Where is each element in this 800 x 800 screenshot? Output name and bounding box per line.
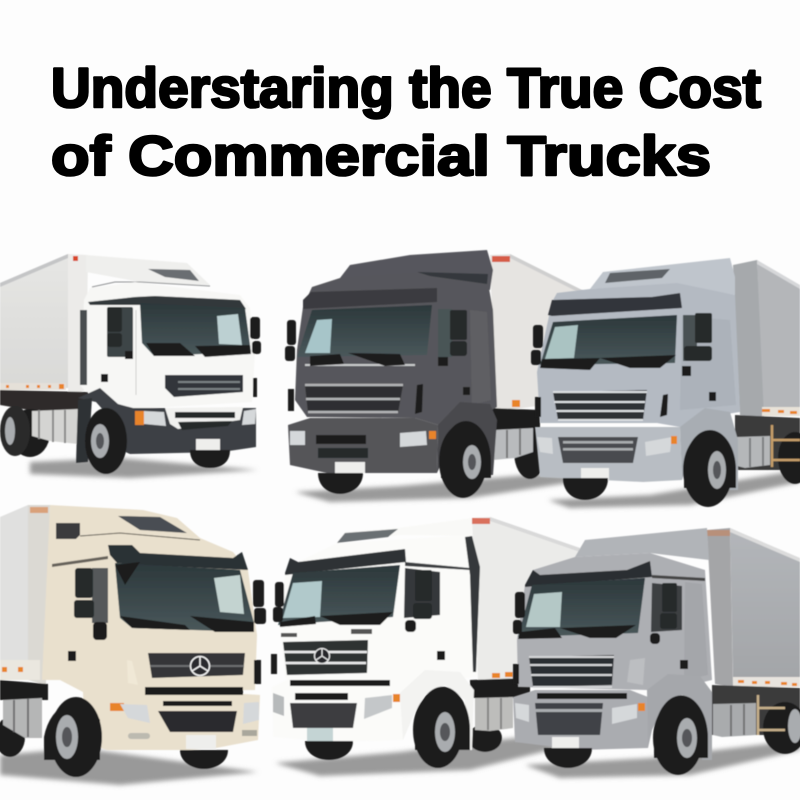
ground shadow xyxy=(525,740,800,778)
fuel tank xyxy=(3,698,42,738)
grille with emblem xyxy=(148,653,245,678)
fuel tank xyxy=(493,428,533,460)
cab side trim and handle xyxy=(52,533,200,685)
left front wheel xyxy=(544,748,592,768)
side window and mirror xyxy=(74,568,108,640)
right front wheel xyxy=(180,750,228,769)
outside mirrors xyxy=(253,580,266,684)
title: Understaring the True Cost xyxy=(51,56,761,119)
cargo box xyxy=(707,528,800,687)
ground shadow xyxy=(275,735,590,776)
bumper xyxy=(535,427,682,482)
truck 2: dark grey cab, top centre xyxy=(285,250,600,502)
door panel xyxy=(627,575,708,685)
fuel tank xyxy=(713,695,785,737)
windshield xyxy=(540,315,677,370)
windshield xyxy=(297,305,432,366)
visor xyxy=(88,296,246,309)
title xyxy=(51,56,761,187)
wheel arch xyxy=(400,670,474,750)
chassis and rear wheel xyxy=(468,678,530,752)
wheel arch xyxy=(680,408,738,490)
mudguard xyxy=(76,398,92,463)
cargo box xyxy=(0,505,50,685)
rear wheel xyxy=(0,406,50,457)
truck 1: white cab, top left xyxy=(0,254,261,478)
bumper xyxy=(513,690,648,750)
chassis and rear wheel xyxy=(0,680,48,757)
side window and mirror xyxy=(438,309,467,366)
wheel arch xyxy=(647,674,712,760)
visor xyxy=(525,561,652,587)
fuel tank xyxy=(32,409,78,444)
cab xyxy=(280,535,480,693)
front wheel xyxy=(653,701,703,775)
front wheel xyxy=(85,408,127,474)
headlights xyxy=(135,409,256,426)
grille xyxy=(305,385,403,413)
windshield xyxy=(518,578,645,639)
roof deflector xyxy=(337,518,472,543)
cab xyxy=(517,553,712,690)
title: of Commercial Trucks xyxy=(51,124,711,187)
visor xyxy=(285,549,406,575)
front wheel xyxy=(439,424,487,498)
side window and mirror xyxy=(404,562,470,660)
left front wheel xyxy=(318,473,363,494)
wheel well xyxy=(44,703,100,760)
truck 5: white cab with star emblem, bottom centre xyxy=(271,517,590,776)
wheel well xyxy=(415,687,470,750)
roof deflector xyxy=(42,505,200,680)
bumper xyxy=(272,678,403,743)
bumper xyxy=(288,418,438,473)
chassis and rear wheel xyxy=(735,415,800,484)
side window and mirror xyxy=(682,313,712,376)
wheel well xyxy=(684,430,736,488)
cab xyxy=(295,273,497,425)
outside mirrors xyxy=(250,317,261,354)
side window and mirror xyxy=(80,307,136,395)
headlights xyxy=(110,702,259,724)
grille xyxy=(165,375,257,397)
wheel well xyxy=(654,695,708,758)
truck 3: silver cab, top right xyxy=(531,258,800,508)
outside mirrors xyxy=(513,592,525,684)
truck 6: grey cab, bottom right xyxy=(513,528,800,778)
front wheel xyxy=(683,433,733,507)
visor xyxy=(108,545,248,570)
windshield xyxy=(140,303,251,357)
windshield xyxy=(278,565,400,627)
chassis xyxy=(0,390,88,420)
outside mirrors xyxy=(285,320,296,411)
grille with emblem xyxy=(281,629,372,675)
visor xyxy=(548,293,682,316)
visor xyxy=(303,288,437,309)
left front wheel xyxy=(305,741,353,760)
door panel xyxy=(660,316,736,417)
bumper xyxy=(83,687,260,750)
door panel xyxy=(415,272,491,414)
outside mirrors xyxy=(531,325,543,417)
ground shadow xyxy=(295,474,600,502)
front wheel xyxy=(50,697,102,777)
bumper xyxy=(78,388,256,454)
grille xyxy=(529,655,614,687)
headlights xyxy=(515,703,645,724)
ground shadow xyxy=(548,470,800,508)
cargo box xyxy=(472,517,580,682)
wheel well xyxy=(441,421,491,478)
roof deflector xyxy=(590,258,735,295)
right front wheel xyxy=(190,450,230,468)
headlights xyxy=(273,693,400,719)
front wheel xyxy=(413,692,463,768)
left front wheel xyxy=(563,478,608,500)
windshield xyxy=(115,562,254,632)
cargo box xyxy=(490,254,590,410)
roof deflector xyxy=(86,255,210,287)
cab rear stripe xyxy=(465,536,480,672)
wheel arch xyxy=(437,402,497,475)
headlights xyxy=(537,436,677,456)
chassis and rear wheel xyxy=(490,408,546,479)
side window and mirror xyxy=(650,583,682,644)
roof deflector xyxy=(340,250,493,290)
fuel tank xyxy=(475,697,513,731)
truck 4: cream cab with star emblem, bottom left xyxy=(0,505,266,785)
grille xyxy=(553,390,647,420)
ground shadow xyxy=(0,748,258,785)
chassis and rear wheel xyxy=(712,685,800,754)
cab xyxy=(80,282,255,410)
outside mirrors xyxy=(271,582,284,674)
roof deflector xyxy=(575,528,709,560)
cargo box xyxy=(0,254,88,397)
cargo box xyxy=(733,260,800,418)
fuel tank xyxy=(737,425,800,468)
headlights xyxy=(290,431,436,447)
cab xyxy=(537,283,740,427)
ground shadow xyxy=(30,458,258,478)
cab xyxy=(42,533,257,692)
